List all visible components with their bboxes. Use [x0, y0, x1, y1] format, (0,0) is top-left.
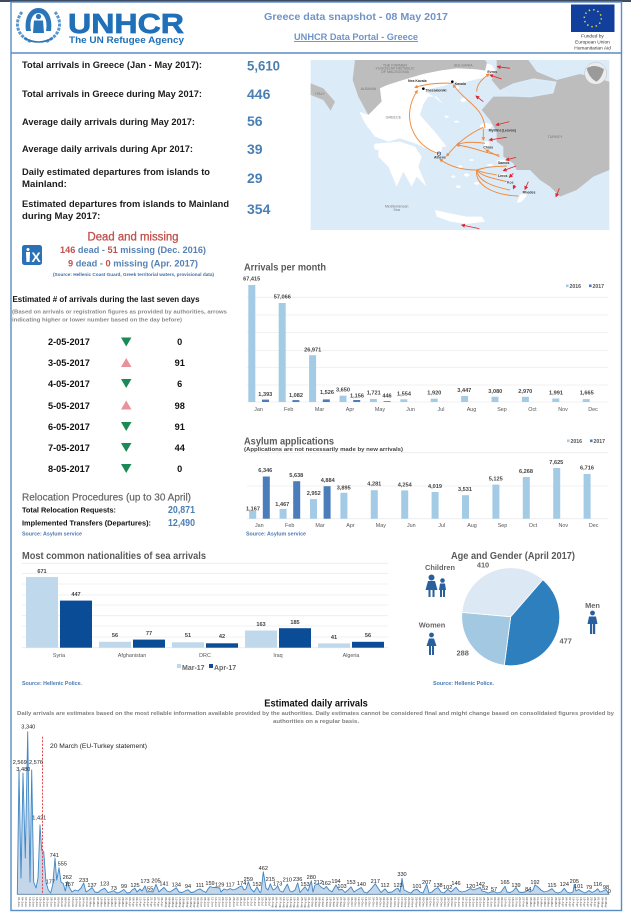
value labels: 153: [346, 880, 356, 886]
value labels: 1,393: [258, 392, 272, 398]
map: sea routes in Greece: [311, 60, 609, 230]
UNHCR logotype: UNHCR: [68, 8, 184, 39]
month axis: May: [375, 407, 385, 413]
figure: average daily Apr: [22, 141, 263, 157]
value labels: 103: [337, 884, 347, 890]
bars 2016: [248, 285, 590, 402]
month axis: [255, 523, 599, 529]
value labels: 52: [482, 886, 488, 892]
value labels: 215: [266, 877, 275, 883]
value labels: 98: [603, 885, 609, 891]
value labels: 6,268: [519, 469, 533, 475]
value labels: 205: [151, 879, 161, 885]
value labels: 94: [185, 884, 191, 890]
map: sea routes in Greece: Kos: [507, 180, 514, 184]
relocation requests: 20,871: [168, 505, 195, 516]
value labels: 3,080: [488, 389, 502, 395]
legend: [177, 664, 236, 672]
implemented transfers: [22, 518, 195, 529]
value labels: 1,167: [246, 506, 260, 512]
value labels: 233: [79, 878, 88, 884]
map: sea routes in Greece: ALBANIA: [361, 87, 377, 91]
value labels: 741: [50, 853, 59, 859]
UNHCR logotype: The UN Refugee Agency: [69, 35, 185, 46]
heading: Estimated # of arrivals during the last seven days: [12, 294, 200, 304]
value labels: 262: [63, 875, 72, 881]
value labels: 7,625: [549, 460, 563, 466]
month axis: Oct: [529, 523, 538, 529]
figure: departures in May: 354: [247, 201, 271, 217]
value labels: 3,447: [457, 388, 471, 394]
value labels: 51: [185, 633, 191, 639]
month axis: Jan: [255, 523, 264, 529]
figure: departures in May: during May 2017:: [22, 211, 100, 222]
value labels: 3,895: [337, 486, 351, 492]
value labels: 207: [422, 880, 431, 886]
heading: Age and Gender (April 2017): [451, 551, 575, 562]
row: 5 May: [48, 400, 185, 411]
icon: person with X: [22, 245, 42, 265]
value labels: 446: [382, 394, 392, 400]
April 2017 figures: 9 dead - 0 missing (Apr. 2017): [68, 258, 198, 270]
value labels: 1,467: [275, 502, 289, 508]
figure: daily departures: Daily estimated departures from islands to: [22, 167, 210, 178]
value labels: 462: [259, 866, 268, 872]
labels: 410: [477, 560, 489, 570]
implemented transfers: 12,490: [168, 518, 195, 529]
row: 2 May: 2-05-2017: [48, 337, 90, 347]
map: sea routes in Greece: THE FORMER: [383, 63, 407, 67]
row: 3 May: 3-05-2017: [48, 358, 90, 368]
month axis: Mar: [315, 523, 325, 529]
value labels: 56: [365, 633, 371, 639]
slice: women: [462, 612, 511, 665]
value labels: 140: [357, 882, 366, 888]
value labels: 1,526: [320, 390, 334, 396]
value labels: 117: [226, 883, 235, 889]
month axis: Jun: [406, 407, 415, 413]
map: sea routes in Greece: GREECE: [386, 116, 402, 120]
title: Greece data snapshot - 08 May 2017: [264, 12, 448, 23]
value labels: 101: [412, 884, 422, 890]
map: sea routes in Greece: Mytilini (Lesvos): [489, 128, 516, 132]
month axis: Dec: [589, 523, 599, 529]
value labels: 137: [87, 883, 97, 889]
month axis: [254, 407, 598, 413]
heading: Asylum applications: [244, 436, 334, 448]
note: (Based on arrivals or registration figures as provided by authorities, arrows: [12, 310, 227, 316]
month axis: Sep: [497, 407, 507, 413]
December 2016 figures: 146 dead - 51 missing (Dec. 2016): [60, 245, 206, 256]
figure: average daily May: [22, 113, 263, 129]
source: Source: Asylum service: [22, 532, 82, 538]
value labels: 1,920: [427, 391, 441, 397]
value labels: 173: [273, 882, 282, 888]
value labels: 3,531: [458, 487, 472, 493]
value labels: 57: [491, 887, 497, 893]
row: 7 May: 44: [175, 443, 186, 453]
value labels: 210: [283, 878, 292, 884]
map: sea routes in Greece: Thessaloniki: [425, 88, 446, 92]
figure: average daily Apr: 39: [247, 141, 263, 157]
icon: woman: [426, 633, 436, 655]
row: 5 May: 5-05-2017: [48, 401, 90, 411]
value labels: 2,952: [307, 491, 321, 497]
bars March 2017: [26, 577, 350, 648]
value labels: 42: [219, 634, 225, 640]
source: Source: Asylum service: [246, 532, 306, 538]
legend: 2016: [570, 439, 582, 445]
value labels: 165: [500, 880, 510, 886]
month axis: Mar: [315, 407, 324, 413]
figure: average daily May: 56: [247, 113, 263, 129]
value labels: [246, 460, 594, 512]
value labels: 5,125: [489, 477, 503, 483]
panel: estimated daily arrivals: [13, 698, 615, 908]
labels: Women: [419, 620, 446, 630]
implemented transfers: Implemented Transfers (Departures):: [22, 518, 151, 528]
value labels: 1,991: [549, 391, 563, 397]
value labels: 41: [331, 635, 337, 641]
note: [12, 310, 227, 324]
value labels: 56: [112, 633, 118, 639]
legend: Apr-17: [214, 665, 236, 672]
value labels: 177: [46, 880, 55, 886]
map: sea routes in Greece: Kavala: [455, 82, 466, 86]
icon: man: [588, 611, 598, 634]
heading: Relocation Procedures (up to 30 April): [22, 492, 191, 504]
row: 6 May: 91: [175, 422, 185, 432]
legend: 2017: [594, 439, 605, 445]
value labels: 0: [608, 889, 611, 895]
value labels: 174: [237, 881, 246, 887]
labels: Men: [585, 601, 600, 610]
value labels: 129: [215, 883, 224, 889]
value labels: 194: [331, 879, 341, 885]
description: [17, 711, 615, 725]
map: sea routes in Greece: Samos: [498, 161, 509, 165]
map: sea routes in Greece: Sea: [393, 208, 401, 212]
value labels: 192: [530, 880, 540, 886]
value labels: 162: [322, 881, 331, 887]
heading: Arrivals per month: [244, 262, 326, 274]
value labels: 5,638: [289, 473, 303, 479]
row: 6 May: [48, 422, 185, 432]
value labels: 123: [100, 882, 109, 888]
legend: [566, 284, 604, 290]
month axis: Jul: [438, 523, 445, 529]
value labels: 3,650: [336, 388, 350, 394]
row: 4 May: [48, 379, 182, 389]
source: (Source: Hellenic Coast Guard, Greek territorial waters, provisional data): [53, 272, 214, 277]
month axis: Aug: [467, 523, 477, 529]
map: sea routes in Greece: Nea Kavala: [408, 79, 427, 83]
row: 5 May: 98: [175, 401, 185, 411]
value labels: 1,554: [397, 392, 412, 398]
slice: men: [504, 580, 560, 666]
source: Source: Hellenic Police.: [433, 681, 494, 687]
value labels: 2,970: [518, 389, 532, 395]
value labels: [243, 277, 594, 400]
value labels: 157: [65, 882, 74, 888]
value labels: 153: [300, 882, 310, 888]
note: indicating higher or lower number based on the day before): [12, 318, 182, 324]
row: 6 May: 6-05-2017: [48, 422, 90, 432]
figure: average daily May: Average daily arrivals during May 2017:: [22, 117, 195, 128]
row: 4 May: 4-05-2017: [48, 379, 90, 389]
icon: person with X: X: [31, 249, 41, 265]
panel: key figures: [22, 58, 280, 222]
description: authorities on a regular basis.: [273, 719, 359, 725]
category axis: Algeria: [343, 653, 359, 659]
value labels: 3,340: [21, 724, 35, 730]
value labels: 280: [307, 875, 316, 881]
panel: relocation procedures: [22, 492, 195, 538]
row: 2 May: 0: [177, 337, 182, 347]
value labels: 152: [252, 882, 262, 888]
value labels: 185: [290, 620, 300, 626]
figure: average daily Apr: Average daily arrivals during Apr 2017:: [22, 144, 193, 155]
map: sea routes in Greece: ITALY: [315, 92, 325, 96]
value labels: 57,066: [274, 295, 291, 301]
value labels: 236: [293, 877, 302, 883]
month axis: Apr: [346, 523, 355, 529]
figure: total arrivals: 5,610: [247, 58, 280, 74]
value labels: 124: [560, 882, 569, 888]
month axis: Apr: [346, 407, 354, 413]
figure: arrivals in May: 446: [247, 86, 271, 102]
value labels: 101: [574, 884, 583, 890]
bars April 2017: [60, 601, 384, 648]
value labels: 1,156: [350, 394, 364, 400]
map: sea routes in Greece: Leros: [498, 174, 508, 178]
value labels: 1,082: [289, 393, 303, 399]
month axis: May: [376, 523, 386, 529]
map: sea routes in Greece: TURKEY: [548, 135, 563, 139]
month axis: Aug: [467, 407, 476, 413]
map: sea routes in Greece: Mediterranean: [385, 204, 408, 208]
icon: EU flag with funding note: European Union: [575, 40, 610, 46]
figure: total arrivals: [22, 58, 280, 74]
value labels: 26,971: [304, 347, 321, 353]
value labels: 1,421: [32, 816, 46, 822]
value labels: 112: [381, 883, 389, 889]
map: sea routes in Greece: Rhodes: [523, 191, 536, 195]
value labels: 123: [393, 883, 403, 889]
value labels: 1,721: [367, 390, 381, 396]
map: sea routes in Greece: Athens: [434, 155, 446, 159]
value labels: 142: [476, 882, 485, 888]
row: 8 May: [48, 464, 182, 474]
value labels: 447: [71, 592, 81, 598]
labels: [419, 560, 600, 658]
bars 2016: [249, 468, 591, 519]
value labels: 99: [121, 884, 127, 890]
value labels: 671: [37, 569, 47, 575]
value labels: 555: [58, 862, 67, 868]
relocation requests: Total Relocation Requests:: [22, 506, 116, 514]
marker: EU-Turkey statement: 20 March (EU-Turkey statement): [50, 743, 147, 750]
value labels: 163: [256, 622, 266, 628]
row: 8 May: 0: [177, 464, 182, 474]
data portal link: UNHCR Data Portal - Greece: [294, 32, 418, 43]
month axis: Jul: [438, 407, 444, 413]
value labels: 138: [433, 883, 443, 889]
labels: 288: [457, 648, 469, 658]
note: (Applications are not necessarily made by new arrivals): [244, 447, 403, 453]
row: 3 May: [48, 358, 185, 368]
row: 7 May: 7-05-2017: [48, 443, 90, 453]
category axis: Syria: [53, 653, 65, 659]
map: sea routes in Greece: BULGARIA: [454, 64, 473, 68]
value labels: 120: [466, 884, 475, 890]
month axis: Dec: [588, 407, 598, 413]
value labels: 159: [205, 881, 215, 887]
value labels: 125: [130, 883, 140, 889]
chart: asylum applications: [244, 436, 608, 538]
labels: Children: [425, 563, 455, 572]
icon: EU flag with funding note: Funded by: [581, 34, 604, 40]
month axis: Feb: [284, 407, 293, 413]
value labels: 212: [314, 880, 323, 886]
month axis: Sep: [498, 523, 507, 529]
category axis: Iraq: [273, 653, 283, 659]
figure: daily departures: [22, 167, 263, 190]
labels: 477: [560, 636, 572, 646]
value labels: 73: [111, 886, 117, 892]
value labels: 259: [244, 877, 253, 883]
heading: Estimated daily arrivals: [264, 698, 368, 710]
legend: 2017: [592, 284, 604, 290]
figure: daily departures: Mainland:: [22, 179, 67, 190]
value labels: 55: [147, 887, 153, 893]
value labels: [13, 724, 611, 895]
map: sea routes in Greece: YUGOSLAV REPUBLIC: [375, 67, 415, 71]
chart: most common nationalities: [22, 550, 388, 687]
area chart: [17, 732, 609, 894]
legend: 2016: [570, 284, 581, 290]
value labels: 141: [159, 882, 169, 888]
row: 4 May: 6: [177, 379, 182, 389]
value labels: 217: [371, 879, 380, 885]
heading: Dead and missing: [88, 232, 178, 244]
value labels: 3,480: [16, 767, 30, 773]
map: sea routes in Greece: OF MACEDONIA: [381, 70, 410, 74]
value labels: 2,576: [29, 760, 43, 766]
map: sea routes in Greece: Chios: [483, 146, 493, 150]
icon: UNHCR emblem: [17, 8, 60, 42]
value labels: 205: [570, 879, 579, 885]
value labels: [37, 569, 371, 641]
chart: arrivals per month: [243, 262, 608, 413]
value labels: 4,254: [398, 483, 413, 489]
value labels: 4,019: [428, 484, 442, 490]
value labels: 84: [525, 887, 531, 893]
row: 3 May: 91: [175, 358, 185, 368]
map: sea routes in Greece: Evros: [487, 70, 497, 74]
month axis: Jan: [254, 407, 263, 413]
value labels: 6,346: [258, 468, 272, 474]
icon: EU flag with funding note: Humanitarian Aid: [574, 46, 611, 52]
month axis: Nov: [558, 407, 568, 413]
bars 2017: [262, 399, 391, 402]
value labels: 146: [451, 881, 461, 887]
category axis: Afghanistan: [118, 653, 146, 659]
value labels: 4,281: [367, 482, 381, 488]
row: 2 May: [48, 337, 182, 347]
slice: children: [462, 568, 543, 617]
relocation requests: [22, 505, 195, 516]
value labels: 2,569: [13, 760, 27, 766]
figure: departures in May: [22, 199, 271, 222]
value labels: 67,415: [243, 277, 260, 283]
legend: [567, 439, 605, 445]
category axis: [53, 653, 359, 659]
month axis: Nov: [559, 523, 568, 529]
value labels: 116: [593, 882, 602, 888]
month axis: Jun: [407, 523, 416, 529]
figure: daily departures: 29: [247, 170, 263, 186]
value labels: 173: [140, 879, 150, 885]
header: [17, 4, 614, 52]
value labels: 115: [548, 883, 556, 889]
figure: total arrivals: Total arrivals in Greece (Jan - May 2017):: [22, 60, 202, 71]
row: 7 May: [48, 443, 186, 453]
value labels: 77: [146, 631, 152, 637]
value labels: 134: [172, 883, 181, 889]
value labels: 330: [397, 872, 407, 878]
value labels: 111: [196, 883, 204, 889]
panel: arrivals during the last seven days: [12, 294, 227, 474]
bars 2017: [263, 476, 331, 519]
value labels: 4,884: [321, 478, 336, 484]
month axis: Feb: [285, 523, 294, 529]
value labels: 1,665: [580, 391, 594, 397]
heading: Most common nationalities of sea arrivals: [22, 550, 206, 562]
icon: children: [426, 574, 446, 597]
legend: Mar-17: [182, 665, 205, 672]
value labels: 6,716: [580, 466, 594, 472]
row: 8 May: 8-05-2017: [48, 464, 90, 474]
category axis: DRC: [199, 653, 211, 659]
figure: arrivals in May: [22, 86, 271, 102]
month axis: Oct: [528, 407, 537, 413]
value labels: 79: [586, 885, 592, 891]
chart: age and gender pie: [419, 551, 600, 687]
value labels: 102: [443, 885, 452, 891]
figure: arrivals in May: Total arrivals in Greece during May 2017:: [22, 89, 202, 100]
figure: departures in May: Estimated departures from islands to Mainland: [22, 199, 229, 210]
date axis: 01-Jan 04-Jan 07-Jan 10-Jan 13-Jan 16-Jan 19-Jan 22-Jan 25-Jan 28-Jan 31-Jan 03-Feb 06-Feb 09-Feb 12-Feb 15-Feb 18-Feb 21-Feb 24-Feb 27-Feb 01-Mar 04-Mar 07-Mar 10-Mar 13-Mar 16-Mar 19-Mar 22-Mar 25-Mar 28-Mar 31-Mar 03-Apr 06-Apr 09-Apr 12-Apr 15-Apr 18-Apr 21-Apr 24-Apr 27-Apr 30-Apr 03-May 06-May 09-May 12-May 15-May 18-May 21-May 24-May 27-May 30-May 02-Jun 05-Jun 08-Jun 11-Jun 14-Jun 17-Jun 20-Jun 23-Jun 26-Jun 29-Jun 02-Jul 05-Jul 08-Jul 11-Jul 14-Jul 17-Jul 20-Jul 23-Jul 26-Jul 29-Jul 01-Aug 04-Aug 07-Aug 10-Aug 13-Aug 16-Aug 19-Aug 22-Aug 25-Aug 28-Aug 31-Aug 03-Sep 06-Sep 09-Sep 12-Sep 15-Sep 18-Sep 21-Sep 24-Sep 27-Sep 30-Sep 03-Oct 06-Oct 09-Oct 12-Oct 15-Oct 18-Oct 21-Oct 24-Oct 27-Oct 30-Oct 02-Nov 05-Nov 08-Nov 11-Nov 14-Nov 17-Nov 20-Nov 23-Nov 26-Nov 29-Nov 02-Dec 05-Dec 08-Dec 11-Dec 14-Dec 17-Dec 20-Dec 23-Dec 26-Dec 29-Dec 01-Jan 04-Jan 07-Jan 10-Jan 13-Jan 16-Jan 19-Jan 22-Jan 25-Jan 28-Jan 31-Jan 03-Feb 06-Feb 09-Feb 12-Feb 15-Feb 18-Feb 21-Feb 24-Feb 27-Feb 02-Mar 05-Mar 08-Mar 11-Mar 14-Mar 17-Mar 20-Mar 23-Mar 26-Mar 29-Mar 01-Apr 04-Apr 07-Apr 10-Apr 13-Apr 16-Apr 19-Apr 22-Apr 25-Apr 28-Apr 01-May 04-May 07-May: [17, 897, 608, 908]
icon: EU flag with funding note: [571, 4, 614, 52]
description: Daily arrivals are estimates based on the most reliable information available provided by the authorities. Daily estimates cannot be considered final and might change based on consolidated figures provided by: [17, 711, 615, 717]
value labels: 139: [511, 883, 521, 889]
panel: dead and missing: [22, 232, 214, 277]
source: Source: Hellenic Police.: [22, 681, 82, 687]
